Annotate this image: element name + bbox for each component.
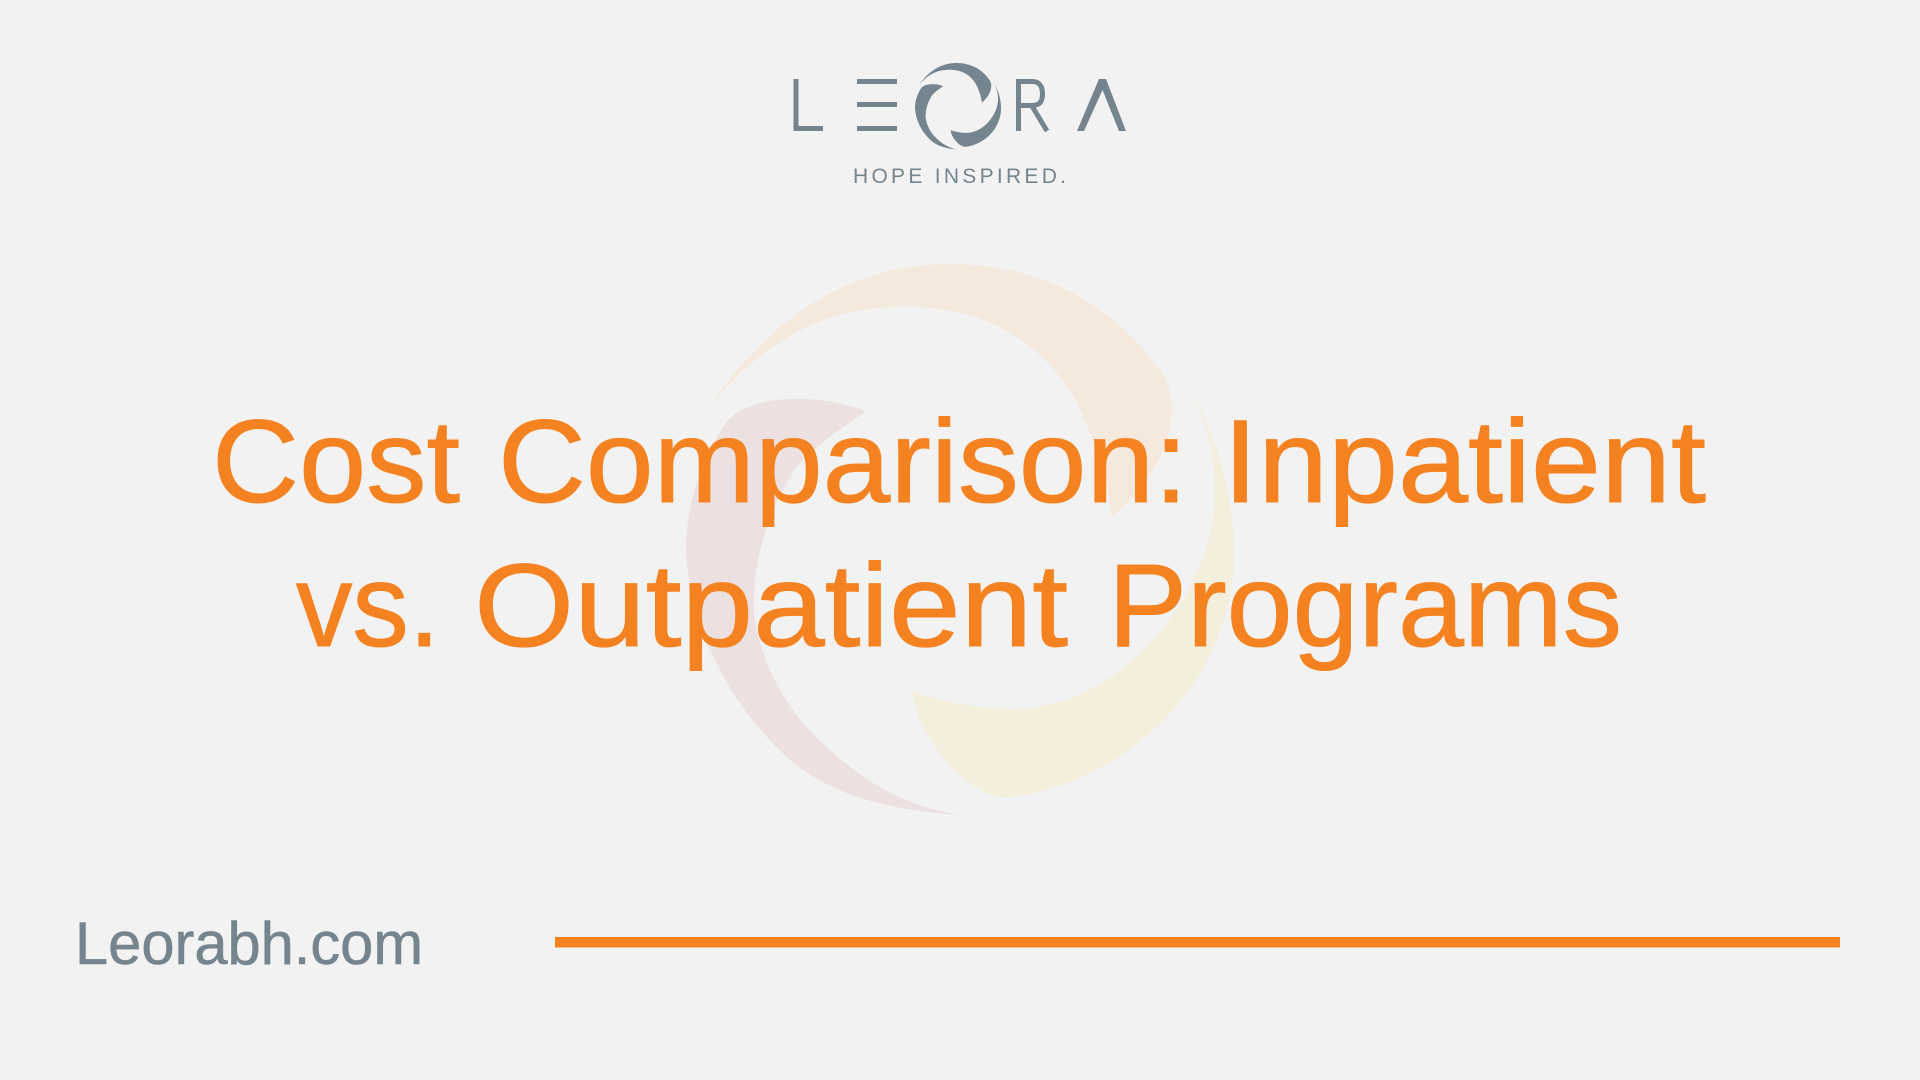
logo letter A [1077, 79, 1126, 131]
footer orange rule [555, 937, 1840, 948]
title: vs. [296, 540, 440, 672]
title: Inpatient [1223, 396, 1706, 528]
logo letter R [1018, 82, 1047, 131]
title: Cost [212, 396, 460, 528]
title: Programs [1108, 540, 1622, 672]
logo: Leora [796, 63, 1126, 188]
title: Comparison: [498, 396, 1188, 528]
logo tagline: HOPE INSPIRED. [853, 165, 1066, 188]
background watermark swirl [686, 264, 1234, 815]
title: Outpatient [474, 540, 1068, 672]
logo letter L [796, 79, 823, 128]
footer website: Leorabh.com [75, 910, 423, 977]
logo swirl mark [915, 63, 1001, 150]
logo letter E [857, 82, 897, 128]
